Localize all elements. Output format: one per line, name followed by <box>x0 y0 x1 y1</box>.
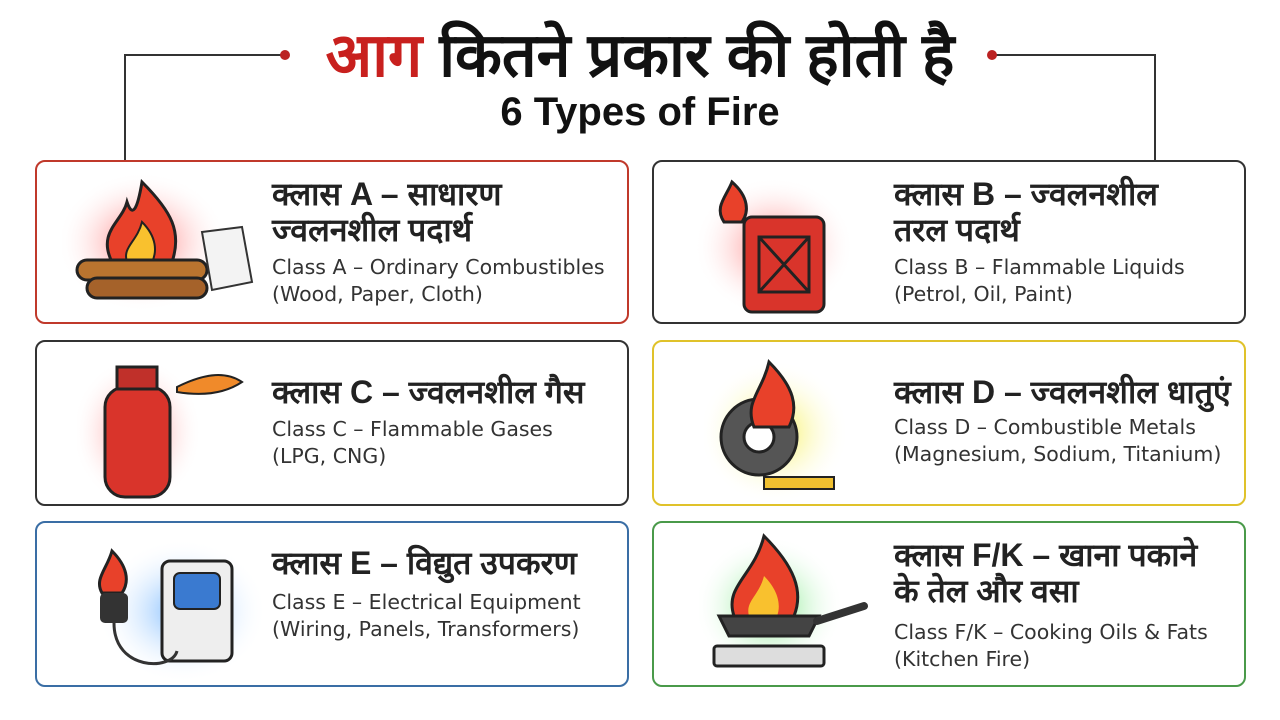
panel: class A <box>35 160 629 324</box>
text: class C: क्लास C – ज्वलनशील गैस <box>272 374 584 410</box>
icon: fuel can <box>714 180 834 314</box>
panel: class A: (Wood, Paper, Cloth) <box>272 282 483 306</box>
icon: campfire <box>76 179 254 300</box>
panel: class D <box>652 340 1246 506</box>
subtitle: 6 Types of Fire <box>500 90 780 134</box>
panel: class D: Class D – Combustible Metals <box>894 415 1196 439</box>
text: class F/K: के तेल और वसा <box>894 573 1079 609</box>
icon: electrical outlet <box>98 548 246 666</box>
text: class B: क्लास B – ज्वलनशील <box>894 176 1158 212</box>
text: class D: क्लास D – ज्वलनशील धातुएं <box>894 374 1231 410</box>
panel: class B: Class B – Flammable Liquids <box>894 255 1185 279</box>
panel: class F/K: Class F/K – Cooking Oils & Fats <box>894 620 1208 644</box>
text: class E: क्लास E – विद्युत उपकरण <box>272 545 577 581</box>
text: class A: क्लास A – साधारण <box>272 176 502 212</box>
panel: class C: Class C – Flammable Gases <box>272 417 553 441</box>
text: class F/K: क्लास F/K – खाना पकाने <box>894 537 1197 573</box>
panel: class C <box>35 340 629 506</box>
text: class B <box>893 176 1159 248</box>
panel: class D: (Magnesium, Sodium, Titanium) <box>894 442 1221 466</box>
text: class F/K <box>893 536 1198 609</box>
text: class B: तरल पदार्थ <box>894 212 1020 248</box>
panel: class E: (Wiring, Panels, Transformers) <box>272 617 579 641</box>
panel: class E <box>35 521 629 687</box>
icon: gas cylinder <box>88 366 244 498</box>
icon: frying pan on stove <box>712 533 868 668</box>
panel: class F/K <box>652 521 1246 687</box>
text: class A: ज्वलनशील पदार्थ <box>272 212 472 248</box>
panel: class E: Class E – Electrical Equipment <box>272 590 581 614</box>
icon: gear with fire <box>715 359 835 490</box>
panel: class F/K: (Kitchen Fire) <box>894 647 1030 671</box>
panel: class B <box>652 160 1246 324</box>
connector lines <box>124 50 1156 160</box>
panel: class A: Class A – Ordinary Combustibles <box>272 255 605 279</box>
panel: class C: (LPG, CNG) <box>272 444 386 468</box>
text: class A <box>271 176 502 248</box>
title: आग कितने प्रकार की होती है <box>326 21 954 89</box>
panel: class B: (Petrol, Oil, Paint) <box>894 282 1073 306</box>
